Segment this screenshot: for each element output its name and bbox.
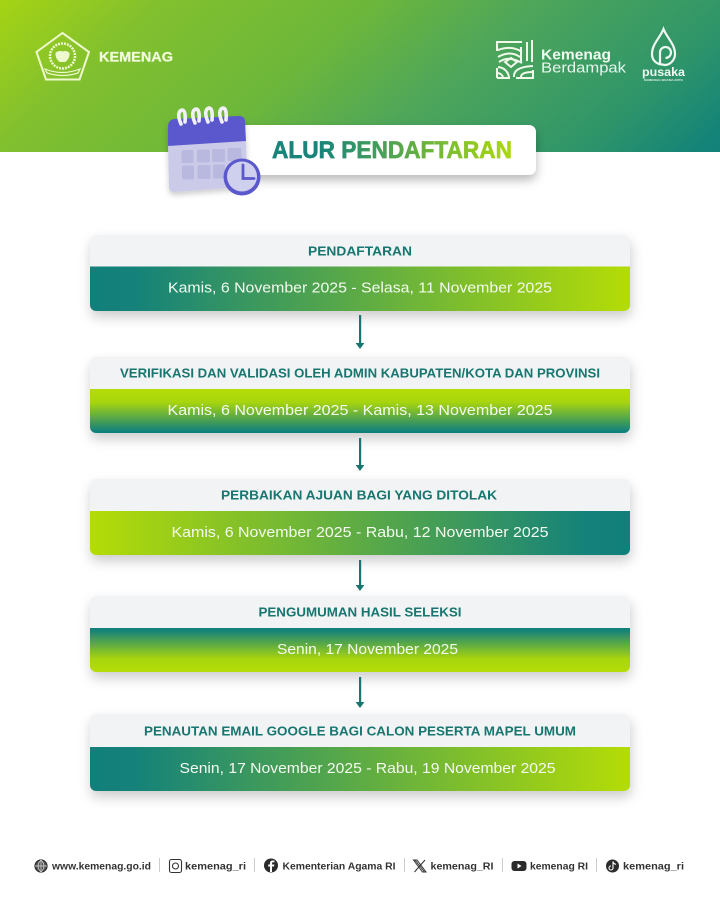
arrow 1 <box>356 315 364 349</box>
logo: pusaka: KEMENAG BUANA ARTA <box>644 78 684 82</box>
logo: pusaka: pusaka <box>642 67 686 79</box>
arrow 2 <box>356 438 364 471</box>
step 5 dates: Senin, 17 November 2025 - Rabu, 19 November 2025 <box>180 760 556 777</box>
icon: clock <box>224 158 260 196</box>
icon: Berdampak mark <box>497 40 533 78</box>
header band <box>0 0 720 152</box>
logo: Kemenag Berdampak: Berdampak <box>541 60 627 76</box>
icon: youtube <box>512 861 526 871</box>
logo: Kemenag Berdampak <box>497 40 627 78</box>
youtube name: kemenag RI <box>530 862 588 872</box>
step 5: Penautan <box>90 714 630 791</box>
icon: X <box>414 860 426 872</box>
icon: instagram <box>170 860 182 872</box>
logo: Kemenag emblem <box>36 33 89 80</box>
step 2: Verifikasi <box>90 357 630 433</box>
arrow 4 <box>356 677 364 708</box>
arrow 3 <box>356 560 364 591</box>
facebook name: Kementerian Agama RI <box>282 862 396 872</box>
step 4: Pengumuman <box>90 596 630 672</box>
step 4 heading: PENGUMUMAN HASIL SELEKSI <box>258 604 462 620</box>
icon: globe <box>35 860 47 872</box>
icon: calendar with clock <box>168 108 260 196</box>
step 2 heading: VERIFIKASI DAN VALIDASI OLEH ADMIN KABUPATEN/KOTA DAN PROVINSI <box>120 366 600 380</box>
website: www.kemenag.go.id <box>51 862 151 872</box>
step 1 dates: Kamis, 6 November 2025 - Selasa, 11 November 2025 <box>168 280 552 296</box>
logo text: KEMENAG: KEMENAG <box>99 50 173 64</box>
step 1 heading: PENDAFTARAN <box>308 244 412 258</box>
icon: pusaka drop <box>652 29 675 65</box>
step 3: Perbaikan <box>90 479 630 555</box>
step 2 dates: Kamis, 6 November 2025 - Kamis, 13 November 2025 <box>168 402 552 419</box>
logo: Kemenag Berdampak: Kemenag <box>541 46 611 64</box>
step 1: Pendaftaran <box>90 235 630 311</box>
title: ALUR PENDAFTARAN <box>272 137 512 164</box>
step 4 dates: Senin, 17 November 2025 <box>277 641 458 658</box>
step 5 heading: PENAUTAN EMAIL GOOGLE BAGI CALON PESERTA MAPEL UMUM <box>144 724 576 738</box>
tiktok handle: kemenag_ri <box>623 862 684 872</box>
x handle: kemenag_RI <box>430 862 494 872</box>
footer: social links <box>35 858 684 872</box>
step 3 dates: Kamis, 6 November 2025 - Rabu, 12 November 2025 <box>172 524 548 541</box>
icon: tiktok <box>606 860 619 872</box>
instagram handle: kemenag_ri <box>185 862 246 872</box>
step 3 heading: PERBAIKAN AJUAN BAGI YANG DITOLAK <box>221 488 498 502</box>
title banner <box>240 125 536 175</box>
icon: facebook <box>264 858 278 872</box>
logo: pusaka <box>642 29 686 82</box>
